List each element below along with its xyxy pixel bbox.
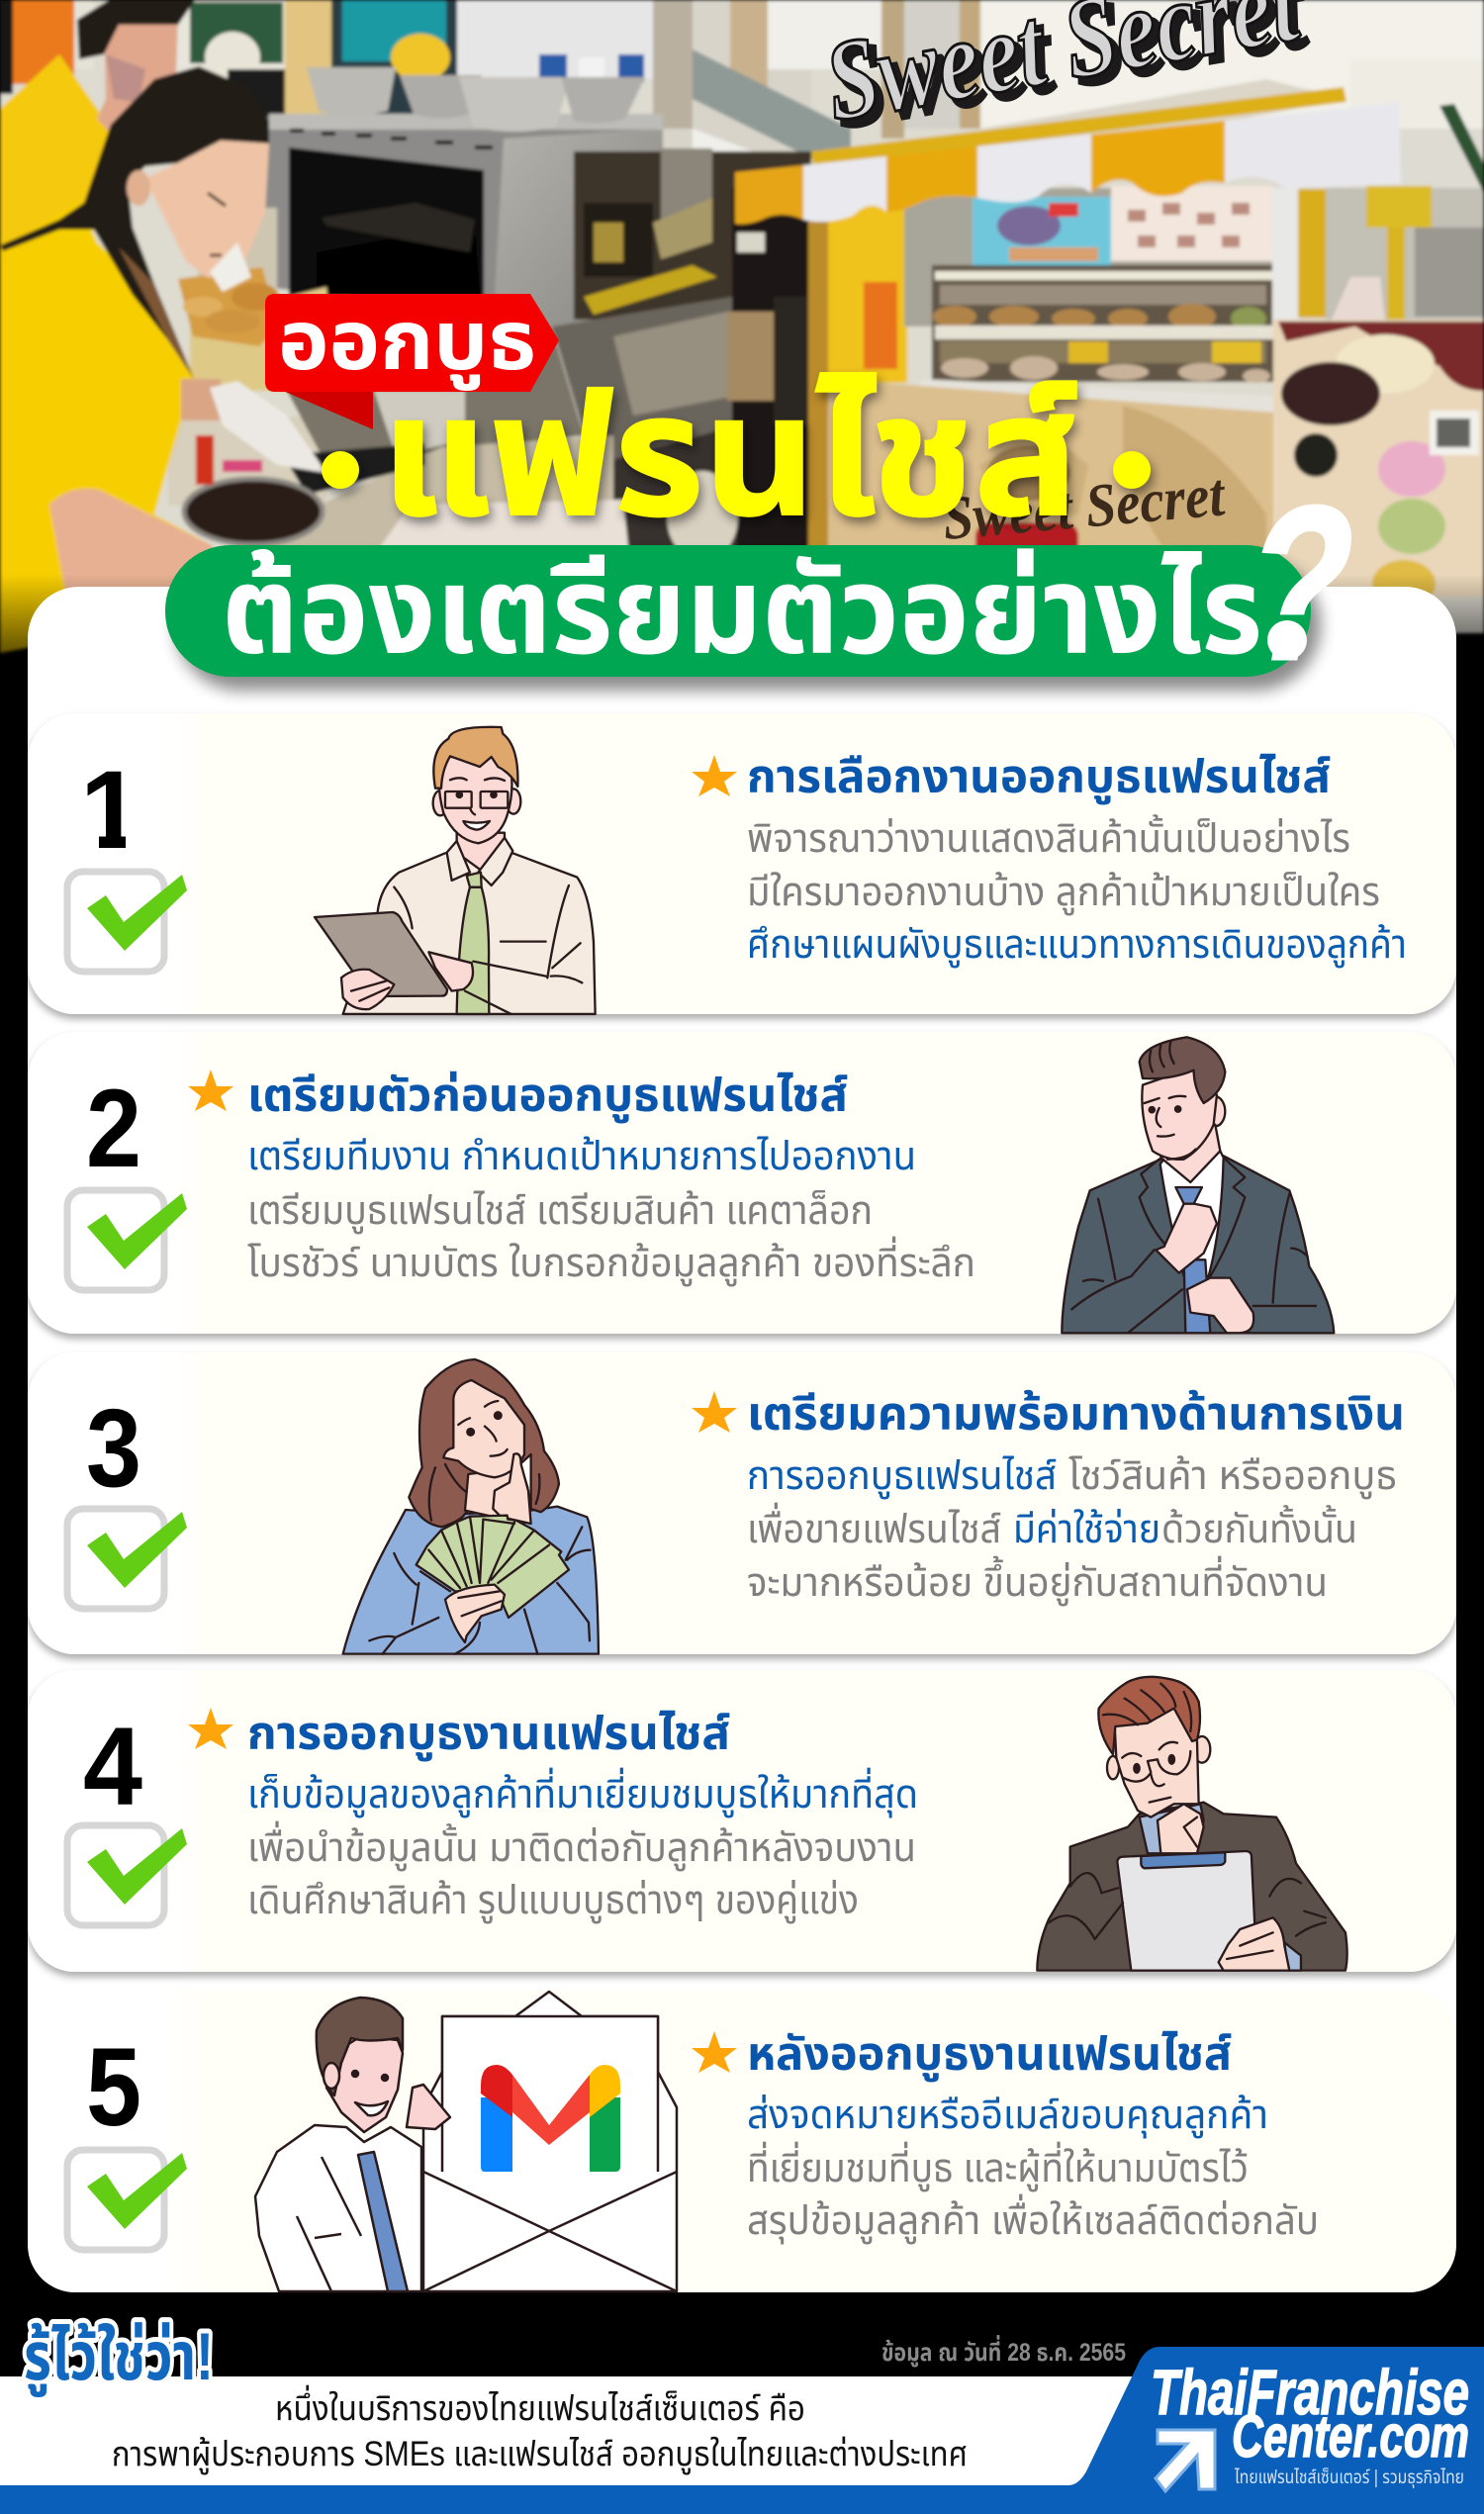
mall ceiling [730, 0, 768, 89]
poster [1273, 320, 1484, 597]
body text [747, 1454, 1397, 1606]
body text: ศึกษาแผนผังบูธและแนวทางการเดินของลูกค้า [747, 923, 1407, 968]
body text: จะมากหรือน้อย ขึ้นอยู่กับสถานที่จัดงาน [747, 1555, 1328, 1606]
body text: เตรียมบูธแฟรนไชส์ เตรียมสินค้า แคตาล็อก [247, 1189, 873, 1234]
body text: มีค่าใช้จ่าย [1013, 1508, 1160, 1551]
number 3: 3 [86, 1386, 141, 1510]
checkbox 4 [67, 1825, 187, 1925]
illustration: man holding envelope [255, 1998, 450, 2291]
hero photo: booth scene [0, 0, 1484, 653]
footer text: การพาผู้ประกอบการ SMEs และแฟรนไชส์ ออกบูธในไทยและต่างประเทศ [112, 2435, 968, 2474]
display case [932, 265, 1278, 382]
body text: ด้วยกันทั้งนั้น [1161, 1504, 1357, 1551]
title: แฟรนไชส์: แฟรนไชส์ [381, 361, 1078, 551]
number 4: 4 [83, 1705, 142, 1828]
checkbox 1 [67, 872, 187, 972]
body text [747, 813, 1407, 968]
body text: มีใครมาออกงานบ้าง ลูกค้าเป้าหมายเป็นใคร [747, 871, 1380, 915]
body text: เก็บข้อมูลของลูกค้าที่มาเยี่ยมชมบูธให้มากที่สุด [247, 1767, 918, 1817]
awning stripes [735, 165, 803, 224]
star [188, 1708, 233, 1749]
woman: shirt, hair, face, arm, glove [0, 203, 212, 653]
title: green pill: ? [1229, 461, 1374, 706]
body text: เดินศึกษาสินค้า รูปแบบบูธต่างๆ ของคู่แข่ง [247, 1879, 859, 1923]
logo panel: ThaiFranchise Center.com [1059, 2347, 1484, 2514]
woman work area [198, 208, 277, 326]
body text: เพื่อนำข้อมูลนั้น มาติดต่อกับลูกค้าหลังจบงาน [247, 1820, 916, 1871]
body text: เพื่อขายแฟรนไชส์ [747, 1502, 1001, 1551]
body text: เตรียมทีมงาน กำหนดเป้าหมายการไปออกงาน [247, 1135, 916, 1178]
illustration: man with tablet [315, 727, 596, 1014]
illustration: man with clipboard [1037, 1677, 1347, 1971]
body text [247, 1767, 918, 1923]
title: badge ออกบูธ [265, 294, 559, 429]
body text: สรุปข้อมูลลูกค้า เพื่อให้เซลล์ติดต่อกลับ [747, 2193, 1319, 2244]
body text [747, 2094, 1319, 2244]
card 1 [28, 713, 1456, 1014]
checkbox 2 [67, 1190, 187, 1290]
steel bowls [307, 67, 396, 116]
footer text [112, 2384, 968, 2474]
card 3 [28, 1352, 1456, 1654]
logo arrow [1156, 2430, 1215, 2491]
footer white band [0, 2376, 1167, 2485]
fade to black at the sides [0, 574, 1484, 717]
heading: เตรียมความพร้อมทางด้านการเงิน [747, 1387, 1405, 1440]
footer blue strip [0, 2485, 1484, 2514]
awning and booth [811, 87, 1346, 166]
oven [265, 117, 663, 326]
number 1: 1 [80, 748, 141, 872]
main white panel [28, 587, 1456, 2292]
body text: โชว์สินค้า หรือออกบูธ [1068, 1454, 1397, 1499]
source note: ข้อมูล ณ วันที่ 28 ธ.ค. 2565 [881, 2335, 1126, 2368]
body text: โบรชัวร์ นามบัตร ใบกรอกข้อมูลลูกค้า ของที่ระลึก [247, 1236, 975, 1286]
heading: เตรียมตัวก่อนออกบูธแฟรนไชส์ [247, 1069, 848, 1123]
body text: พิจารณาว่างานแสดงสินค้านั้นเป็นอย่างไร [747, 813, 1350, 861]
illustration: envelope with Gmail logo [423, 1992, 677, 2291]
counter lettering: Sweet Secret [940, 461, 1229, 553]
card 5 [28, 1990, 1456, 2292]
heading: การเลือกงานออกบูธแฟรนไชส์ [747, 750, 1331, 804]
body text: ที่เยี่ยมชมที่บูธ และผู้ที่ให้นามบัตรไว้ [747, 2141, 1249, 2191]
heading: การออกบูธงานแฟรนไชส์ [247, 1707, 730, 1761]
Gmail M logo [481, 2065, 620, 2172]
title: green pill: ต้องเตรียมตัวอย่างไร [222, 543, 1262, 680]
number 2: 2 [86, 1067, 141, 1190]
title: green pill [165, 461, 1374, 706]
body text: การออกบูธแฟรนไชส์ [747, 1454, 1057, 1499]
illustration: man in suit [1062, 1037, 1334, 1333]
number 5: 5 [86, 2025, 141, 2149]
illustration: woman with money [343, 1359, 599, 1654]
man in background [0, 54, 111, 267]
star [692, 755, 737, 796]
star [188, 1070, 233, 1111]
card 4 [28, 1670, 1456, 1972]
title: badge ออกบูธ: ออกบูธ [278, 294, 536, 391]
body text [247, 1135, 975, 1286]
tag: รู้ไว้ใช่ว่า: รู้ไว้ใช่ว่า! [24, 2319, 214, 2397]
footer text: หนึ่งในบริการของไทยแฟรนไชส์เซ็นเตอร์ คือ [275, 2384, 805, 2428]
star [692, 1391, 737, 1433]
counter [828, 379, 1276, 594]
card 2 [28, 1032, 1456, 1334]
checkbox 5 [67, 2150, 187, 2250]
checkbox 3 [67, 1509, 187, 1609]
body text: ส่งจดหมายหรืออีเมล์ขอบคุณลูกค้า [747, 2094, 1268, 2138]
heading: หลังออกบูธงานแฟรนไชส์ [747, 2027, 1232, 2082]
food-court stall behind glass [574, 151, 811, 320]
star [692, 2031, 737, 2073]
